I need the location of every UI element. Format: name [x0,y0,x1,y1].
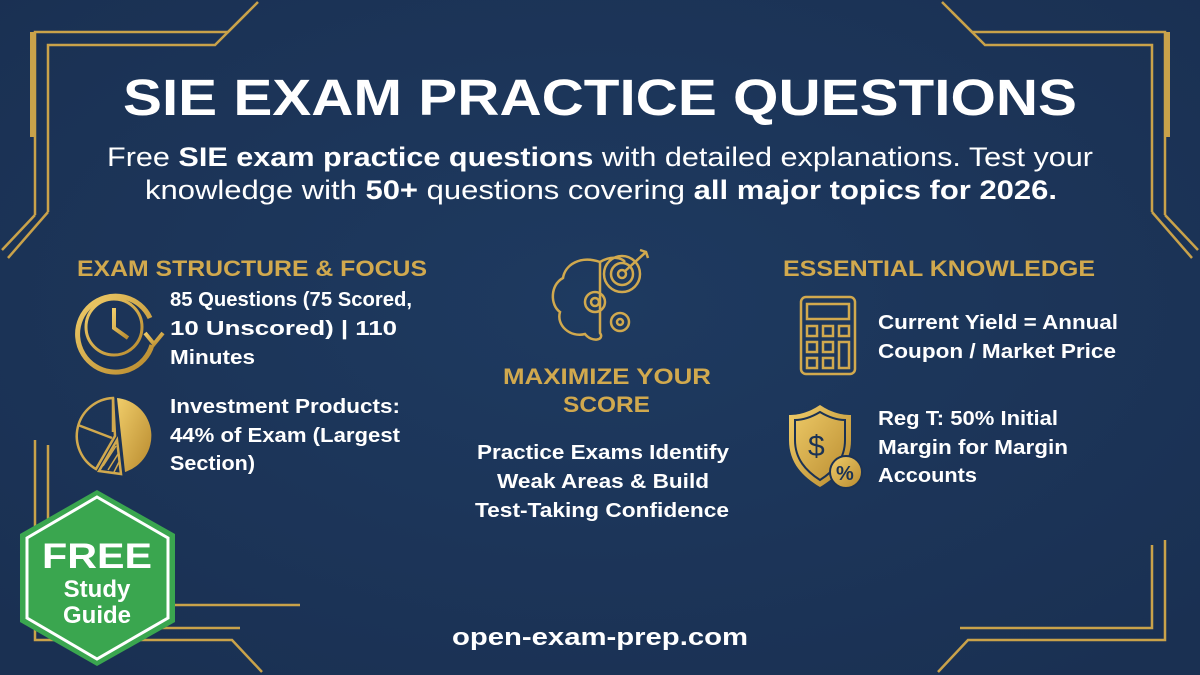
panel: maximize score: SCORE [563,392,650,417]
icon: pie chart [77,398,151,474]
subtitle: Free SIE exam practice questions with detailed explanations. Test your [107,142,1093,172]
panel: exam structure: 10 Unscored) | 110 [170,318,397,340]
panel: exam structure: Investment Products: [170,396,400,418]
icon: clock [78,296,163,372]
badge: free study guide: FREE [42,537,152,576]
panel: maximize score [475,250,730,522]
icon: calculator [801,297,855,374]
panel: essential knowledge: ESSENTIAL KNOWLEDGE [783,256,1095,281]
panel: exam structure: 85 Questions (75 Scored, [170,289,412,311]
panel: essential knowledge: Accounts [878,465,977,487]
panel: essential knowledge [783,256,1118,488]
panel: exam structure: Section) [170,453,255,475]
panel: exam structure: 44% of Exam (Largest [170,425,400,447]
badge: free study guide: Study [64,576,131,603]
footer url: open-exam-prep.com [452,624,748,651]
panel: exam structure: EXAM STRUCTURE & FOCUS [77,256,427,281]
panel: maximize score: Test-Taking Confidence [475,500,729,522]
panel: essential knowledge: Coupon / Market Price [878,341,1116,363]
icon: shield [789,405,862,488]
badge: free study guide: Guide [63,602,131,629]
panel: maximize score: Practice Exams Identify [477,442,730,464]
panel: essential knowledge: Reg T: 50% Initial [878,408,1058,430]
subtitle [107,142,1093,205]
panel: essential knowledge: Current Yield = Annual [878,312,1118,334]
icon: brain target gears [553,250,648,340]
subtitle: knowledge with 50+ questions covering all major topics for 2026. [145,175,1057,205]
panel: maximize score: Weak Areas & Build [497,471,709,493]
panel: exam structure [77,256,427,475]
title: SIE EXAM PRACTICE QUESTIONS [123,69,1077,126]
panel: maximize score: MAXIMIZE YOUR [503,364,711,389]
icon: shield: $ [808,430,825,463]
badge: free study guide [20,490,175,666]
panel: exam structure: Minutes [170,347,255,369]
panel: essential knowledge: Margin for Margin [878,437,1068,459]
icon: shield: % [836,463,854,485]
